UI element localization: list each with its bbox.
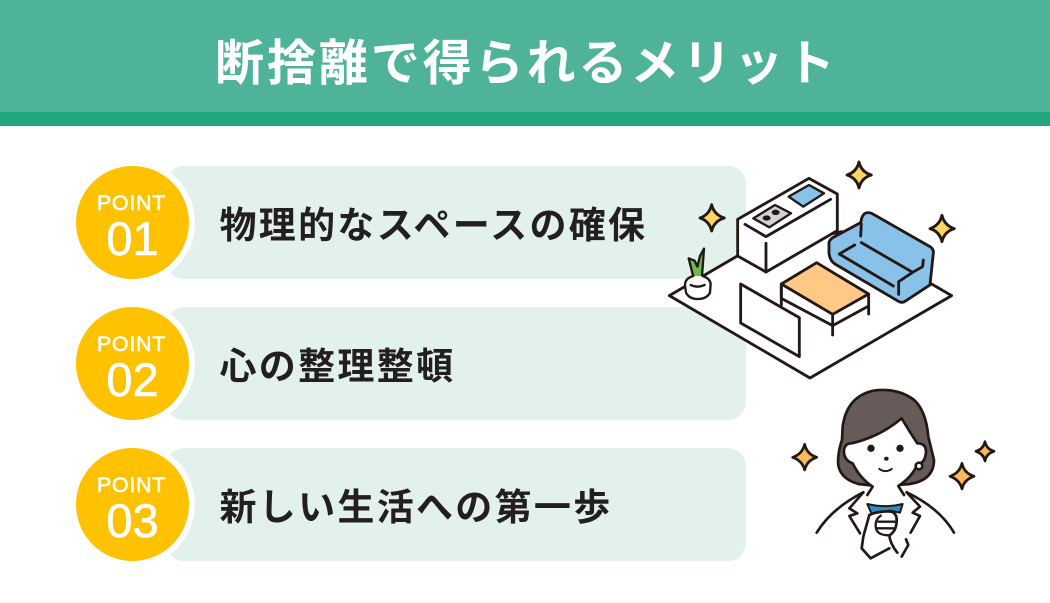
point 1 badge [76,166,189,279]
header accent strip [0,112,1050,126]
sparkles [700,162,954,242]
point 1 text: 物理的なスペースの確保 [220,205,647,246]
point 1 ring [70,160,195,285]
hair [838,390,934,486]
point 1 badge: 01 [106,212,159,265]
blue shirt [867,504,903,514]
sofa [829,213,933,302]
header band [0,0,1050,126]
sparkles [793,442,994,489]
point 3 text: 新しい生活への第一歩 [220,487,612,528]
coat [817,492,954,533]
kitchen counter [738,178,837,272]
clasped hands [862,511,908,558]
point 2 badge [76,307,189,420]
panel: point 2 [76,307,746,420]
point 3 badge: 03 [106,494,159,547]
face outline [844,418,926,495]
icon: tidy room illustration [669,162,954,378]
point 3 badge: POINT [97,473,166,497]
facial features [867,445,904,461]
point 3 ring [70,442,195,567]
face [844,418,926,506]
point 3 badge [76,448,189,561]
point 2 ring [70,301,195,426]
potted plant [685,249,711,299]
icon: woman with clasped hands [793,390,994,558]
earring [916,463,922,469]
point 2 bar [166,307,746,420]
panel: point 3 [76,448,746,561]
point 1 badge: POINT [97,191,166,215]
point 2 badge: POINT [97,332,166,356]
point 2 badge: 02 [106,353,159,406]
smile [879,469,892,471]
coffee table [781,263,869,335]
floor [669,232,952,378]
coat lapels [849,492,920,533]
point 1 bar [166,166,746,279]
panel: point 1 [76,166,746,279]
title: 断捨離で得られるメリット [215,37,838,91]
tv screen [741,284,799,357]
point 2 text: 心の整理整頓 [220,346,455,387]
point 3 bar [166,448,746,561]
